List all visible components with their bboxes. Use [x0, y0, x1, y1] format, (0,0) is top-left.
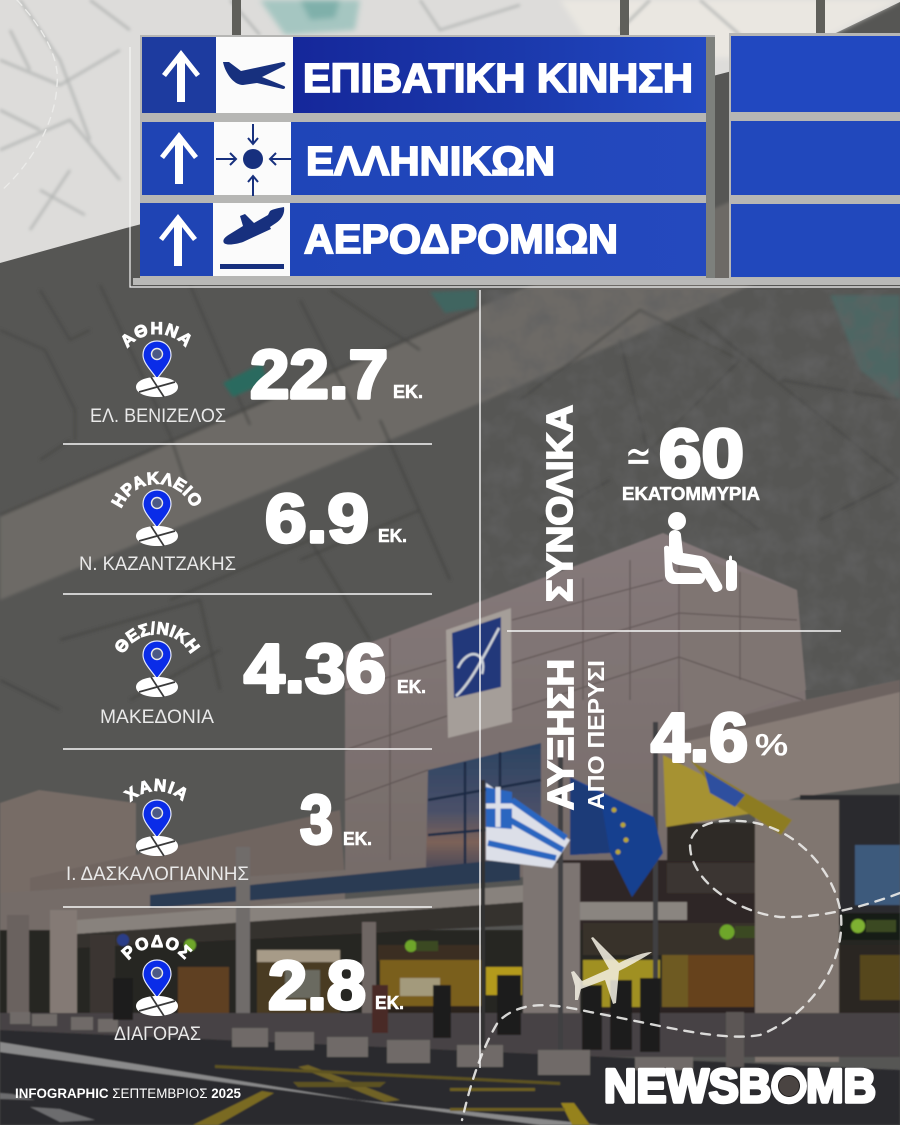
lower-left block and sloped wall	[0, 790, 136, 895]
heading total: ΣΥΝΟΛΙΚΑ	[539, 405, 580, 602]
pin icon Thessaloniki	[136, 641, 178, 697]
sign row: airports: ΑΕΡΟΔΡΟΜΙΩΝ	[304, 216, 618, 262]
percent sign: %	[755, 729, 788, 762]
value Thessaloniki: 4.36	[244, 630, 386, 707]
value Rhodes: 2.8	[268, 947, 366, 1024]
panel: airport sign	[133, 33, 900, 285]
planters	[10, 1012, 693, 1075]
approximately symbol: ≃	[625, 427, 652, 484]
sign row: airports	[140, 203, 706, 276]
left shops	[178, 967, 229, 1020]
airport row: Thessaloniki	[100, 621, 426, 728]
pin icon Athens	[136, 341, 178, 397]
airport row: Rhodes	[114, 934, 404, 1045]
pillars	[7, 915, 29, 1015]
logo panel	[446, 608, 512, 738]
unit Heraklion: ΕΚ.	[378, 526, 407, 546]
panel: total passengers	[539, 405, 760, 602]
airport name Thessaloniki: ΜΑΚΕΔΟΝΙΑ	[100, 707, 214, 728]
second sign blue panels	[731, 36, 900, 277]
total unit: ΕΚΑΤΟΜΜΥΡΙΑ	[622, 484, 760, 504]
pin icon Rhodes	[136, 960, 178, 1016]
right shops	[583, 923, 755, 955]
total value: 60	[659, 415, 744, 492]
curved label Thessaloniki: ΘΕΣ/ΝΙΚΗ	[115, 621, 200, 654]
right upper storefront	[554, 860, 759, 930]
unit Athens: ΕΚ.	[393, 382, 423, 402]
subheading growth: ΑΠΟ ΠΕΡΥΣΙ	[583, 660, 609, 810]
growth value: 4.6	[651, 699, 748, 776]
airport name Chania: Ι. ΔΑΣΚΑΛΟΓΙΑΝΝΗΣ	[66, 864, 249, 885]
airport row: Chania	[66, 778, 372, 885]
curved label Rhodes: ΡΟΔΟΣ	[120, 934, 193, 960]
value Chania: 3	[300, 781, 333, 858]
curved label Heraklion: ΗΡΑΚΛΕΙΟ	[110, 471, 202, 508]
icon: seated passenger with luggage	[664, 512, 737, 592]
flags	[486, 783, 570, 868]
window	[426, 743, 541, 867]
people	[113, 975, 660, 1052]
curved label Athens: ΑΘΗΝΑ	[122, 322, 191, 349]
unit Chania: ΕΚ.	[343, 829, 372, 849]
pin icon Heraklion	[136, 490, 178, 546]
sign row: domestic: ΕΛΛΗΝΙΚΩΝ	[306, 138, 555, 184]
main facade	[345, 533, 806, 885]
canopy and solar panels	[150, 858, 520, 908]
icon: white plane	[571, 937, 652, 1004]
airport row: Athens	[90, 322, 423, 427]
sign hangers	[232, 0, 825, 37]
panel: growth from last year	[540, 659, 788, 810]
unit Rhodes: ΕΚ.	[375, 993, 404, 1013]
airport name Athens: ΕΛ. ΒΕΝΙΖΕΛΟΣ	[90, 406, 226, 427]
unit Thessaloniki: ΕΚ.	[397, 677, 426, 697]
sign row: passenger	[142, 37, 706, 113]
value Athens: 22.7	[250, 336, 388, 413]
right roof band	[684, 680, 900, 830]
airport name Rhodes: ΔΙΑΓΟΡΑΣ	[114, 1024, 201, 1045]
sign row: domestic	[142, 122, 706, 196]
airport building	[0, 533, 900, 1125]
ground	[0, 1013, 900, 1057]
heading growth: ΑΥΞΗΣΗ	[540, 659, 581, 810]
pin icon Chania	[136, 800, 178, 856]
value Heraklion: 6.9	[265, 480, 369, 557]
logo: Newsbomb: NEWSBOMB	[604, 1059, 876, 1112]
footer credit: INFOGRAPHIC ΣΕΠΤΕΜΒΡΙΟΣ 2025	[15, 1086, 241, 1101]
sign row: passenger: ΕΠΙΒΑΤΙΚΗ ΚΙΝΗΣΗ	[303, 55, 693, 101]
airport row: Heraklion	[79, 471, 407, 575]
curved label Chania: ΧΑΝΙΑ	[122, 778, 186, 803]
airport name Heraklion: Ν. ΚΑΖΑΝΤΖΑΚΗΣ	[79, 554, 236, 575]
dark map zone	[0, 130, 900, 710]
